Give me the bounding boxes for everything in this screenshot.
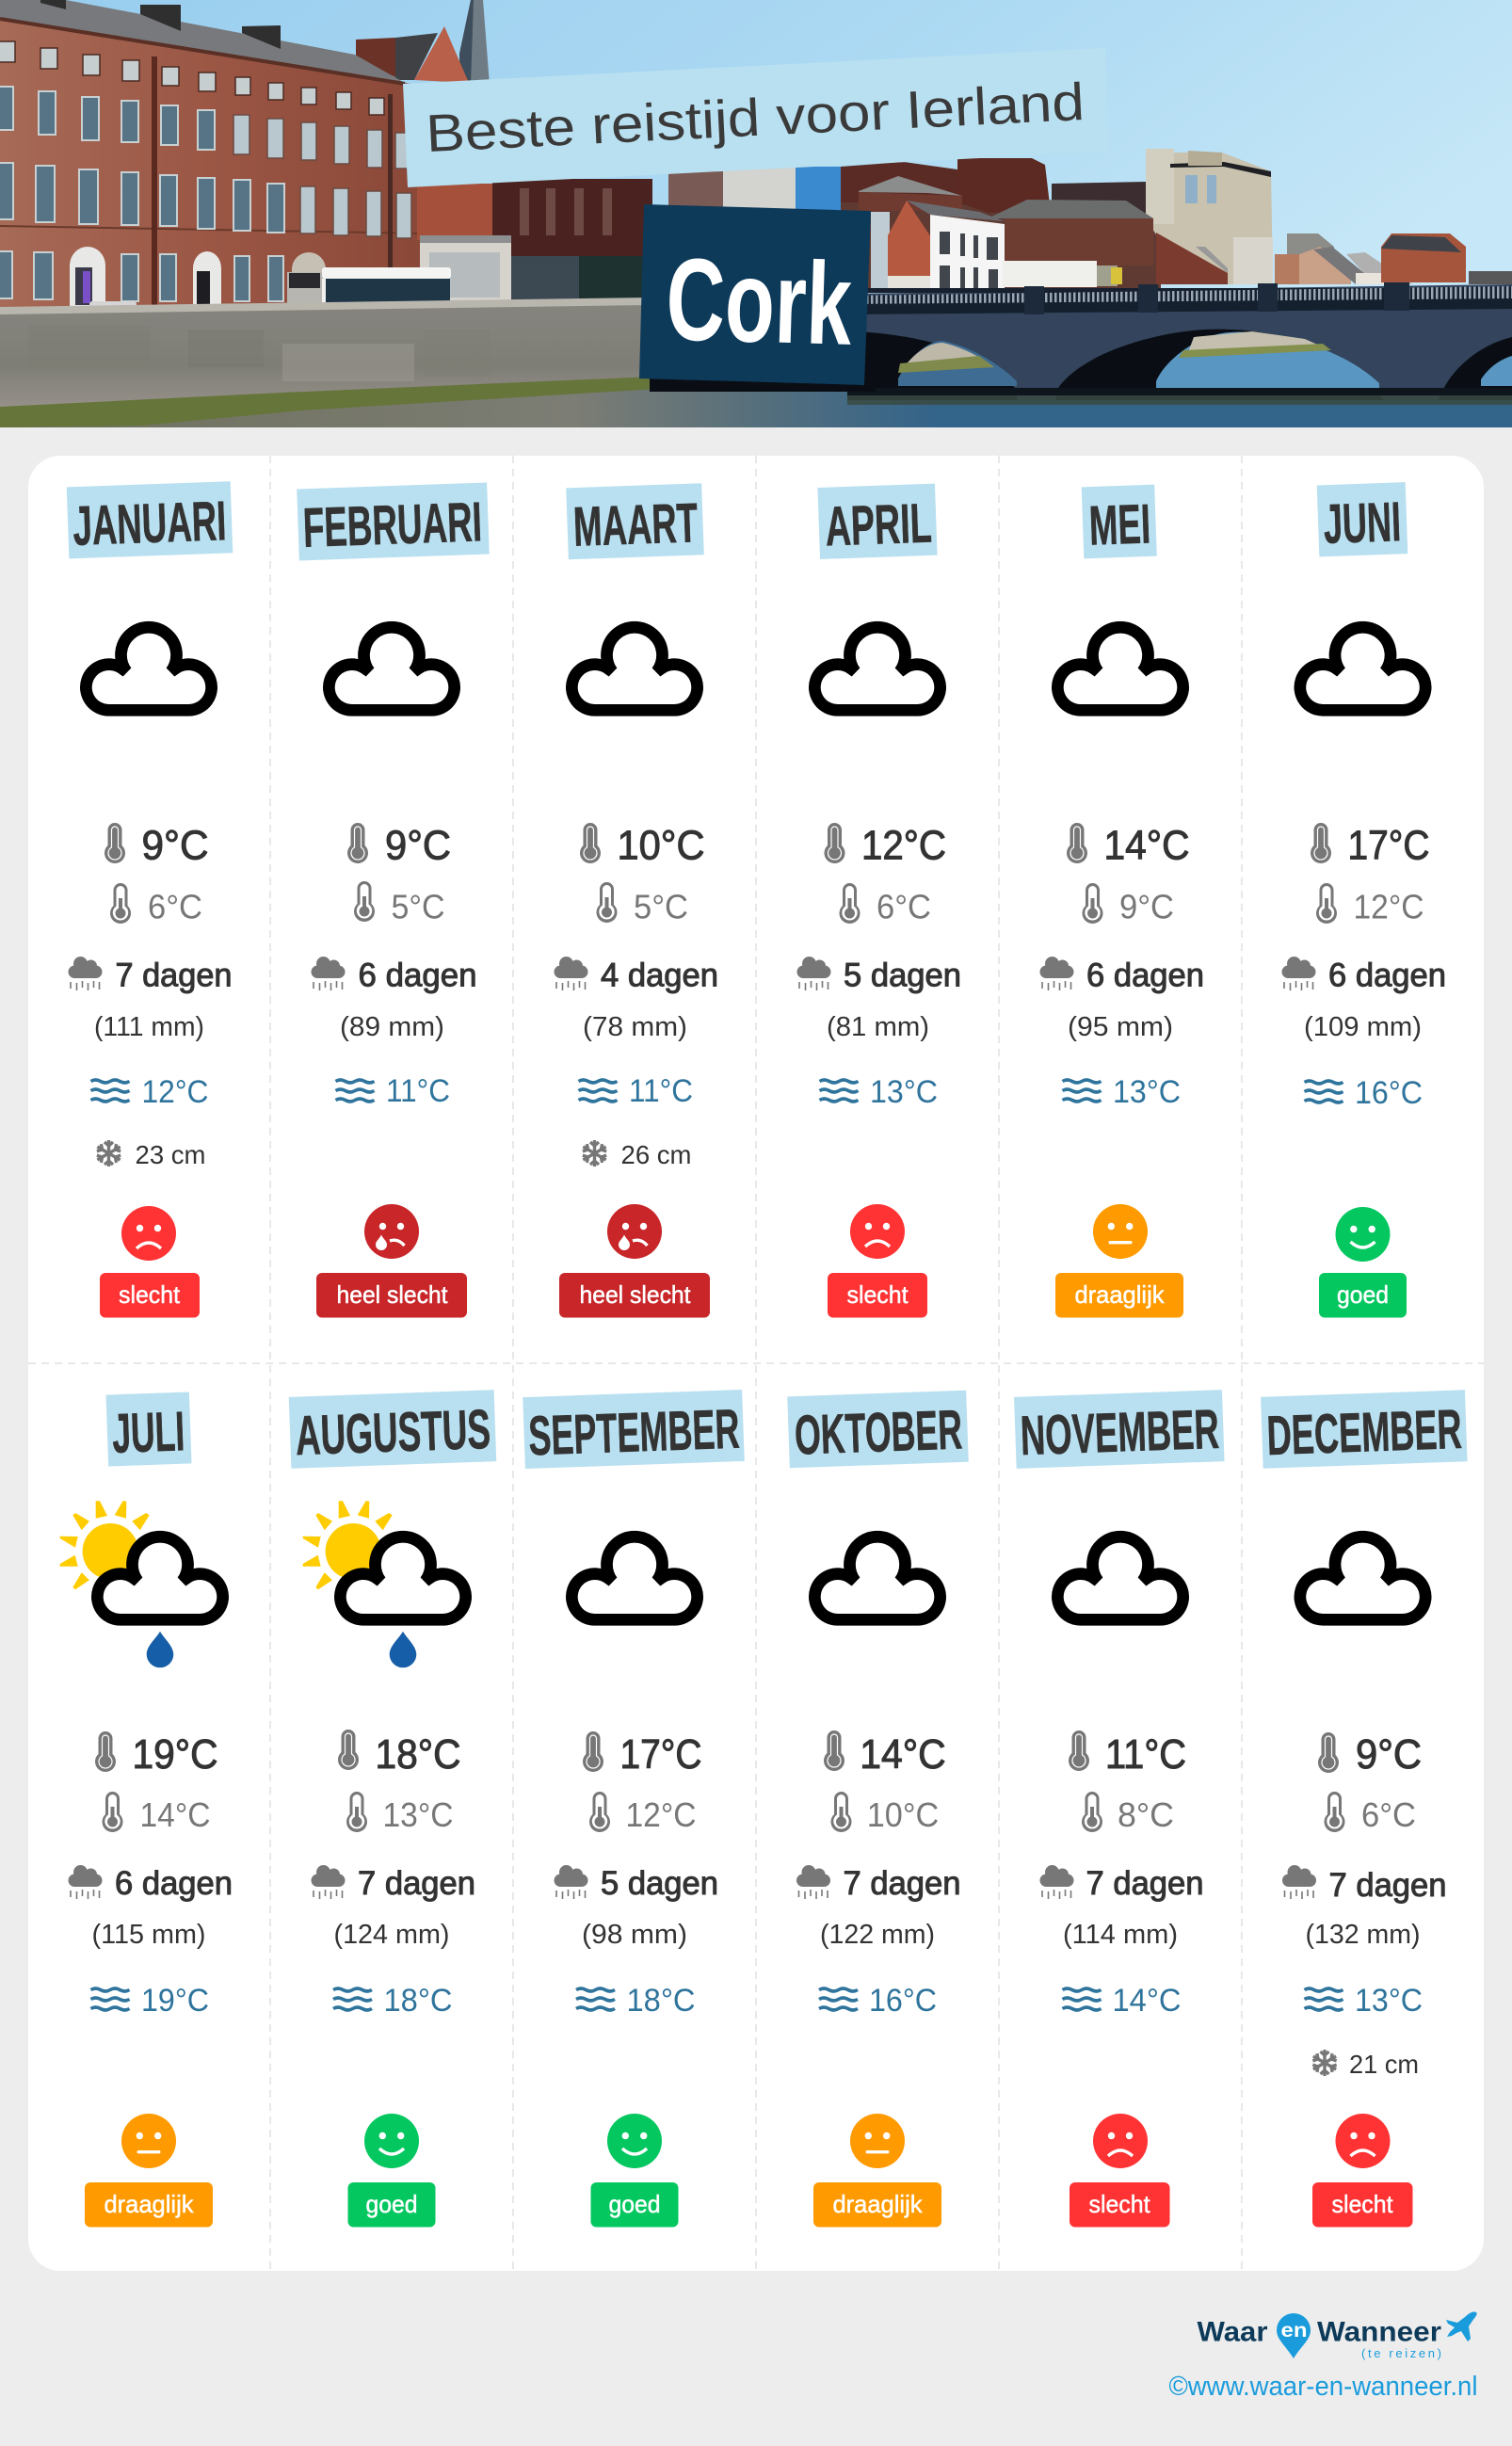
sea temperature: 18°C [384,1983,452,2019]
month heading: oktober [787,1391,969,1468]
min temperature [1316,883,1424,926]
min temperature [597,882,688,926]
month heading: maart [566,483,704,559]
month heading: november [1014,1390,1225,1469]
month heading: april [817,484,938,559]
panel: november [1014,1390,1225,2228]
snow [1311,2050,1419,2079]
icon: plane [1446,2311,1477,2341]
rating label [1070,2182,1169,2228]
panel: januari [67,481,233,1317]
min temperature [589,1792,697,1834]
sea temperature [1062,1983,1181,2019]
rating label [85,2182,213,2228]
max temperature: 19°C [132,1731,218,1778]
sea temperature [819,1074,938,1110]
sea temperature: 13°C [870,1074,938,1110]
icon: cloud [1057,627,1183,710]
max temperature: 17°C [619,1731,702,1778]
icon: cloud [1300,627,1425,710]
month heading: februari: FEBRUARI [302,491,483,559]
rating label: slecht [847,1280,909,1309]
bus [287,267,451,306]
sea temperature [333,1983,452,2019]
rainfall: (98 mm) [582,1920,687,1950]
rating label: goed [608,2190,661,2218]
rain days: 7 dagen [1086,1865,1203,1902]
rainfall: (111 mm) [94,1012,204,1042]
rating label [813,2182,941,2228]
panel: augustus [289,1390,496,2228]
max temperature [825,823,946,868]
max temperature: 9°C [385,823,451,868]
month heading: mei [1082,485,1157,558]
sea temperature [1305,1983,1423,2019]
title banner: Beste reistijd voor Ierland [425,72,1086,163]
max temperature: 12°C [861,823,946,868]
min temperature [840,883,931,926]
month heading: januari [67,481,233,558]
quay wall [0,298,650,318]
min temperature: 12°C [1354,887,1424,926]
panel: juli [60,1392,233,2228]
rainfall: (132 mm) [1305,1920,1420,1950]
max temperature [1069,1730,1186,1778]
sea temperature [90,1074,209,1110]
month heading: augustus: AUGUSTUS [295,1398,491,1467]
max temperature [1318,1731,1422,1778]
max temperature: 10°C [618,823,704,868]
icon: cloud [571,1537,698,1619]
max temperature [583,1731,702,1778]
min temperature [110,883,202,926]
month heading: juli [106,1392,191,1467]
icon: location pin [1277,2313,1311,2358]
rain days: 7 dagen [358,1865,475,1902]
city name plate: Cork [639,204,871,385]
rating label: goed [365,2190,418,2218]
white card with calendar [28,456,1484,2271]
panel: april [796,484,961,1318]
rating smiley [364,1204,419,1259]
max temperature [580,823,704,868]
sea temperature: 13°C [1113,1074,1181,1110]
rainfall: (78 mm) [583,1012,687,1042]
icon: cloud [1300,1537,1425,1619]
month heading: februari [297,482,490,561]
min temperature [830,1792,939,1834]
sea temperature: 18°C [627,1983,695,2019]
sea temperature [90,1983,209,2019]
min temperature: 10°C [867,1795,939,1834]
logo: Waar en Wanneer: Waar [1198,2317,1268,2348]
sea temperature: 13°C [1355,1983,1423,2019]
rainfall: (122 mm) [820,1920,935,1950]
bridge [847,284,1512,400]
rain days: 6 dagen [358,957,476,994]
water [0,381,1512,427]
rating label: slecht [1088,2190,1150,2218]
month heading: oktober: OKTOBER [794,1398,963,1467]
rating smiley [1093,2114,1148,2168]
panel: maart [554,483,718,1318]
sea temperature: 14°C [1113,1983,1181,2019]
logo: Waar en Wanneer [1198,2311,1477,2360]
rating label [1055,1273,1183,1318]
arched doors [70,247,326,307]
rating label: slecht [119,1280,181,1309]
min temperature [1083,883,1174,926]
title banner [403,48,1109,187]
snow [95,1140,205,1169]
rating smiley [121,1206,176,1261]
snow: 21 cm [1349,2050,1419,2079]
rainfall: (124 mm) [333,1920,450,1950]
rating smiley [1335,2114,1390,2168]
rating label: heel slecht [337,1280,448,1309]
min temperature [1082,1792,1174,1834]
icon: sun, cloud and rain drop [60,1501,223,1667]
icon: cloud [86,627,212,710]
min temperature [354,881,444,926]
rating label [591,2182,678,2228]
panel: december [1261,1390,1468,2228]
logo: Waar en Wanneer: en [1280,2320,1307,2341]
rain days: 7 dagen [1329,1867,1446,1904]
rating smiley [1335,1207,1390,1262]
sea temperature: 11°C [629,1073,693,1109]
min temperature: 5°C [392,887,444,926]
rainfall: (115 mm) [92,1920,205,1950]
grass bank [0,377,673,427]
min temperature [346,1792,454,1834]
rating label [559,1273,710,1318]
max temperature: 14°C [860,1731,946,1778]
min temperature: 13°C [382,1795,454,1834]
icon: cloud [814,627,941,710]
rainfall: (89 mm) [340,1012,444,1042]
sea temperature [819,1983,937,2019]
max temperature [105,823,209,868]
rainfall: (81 mm) [827,1012,929,1042]
rain days: 7 dagen [844,1865,960,1902]
header photo: Cork quay and bridge [0,0,1512,427]
rain days: 5 dagen [601,1865,718,1902]
max temperature: 11°C [1105,1731,1186,1778]
rating label [828,1273,927,1318]
min temperature: 6°C [1361,1795,1416,1834]
max temperature [95,1731,218,1778]
max temperature: 18°C [375,1731,461,1778]
min temperature: 14°C [139,1795,211,1834]
max temperature [824,1730,946,1778]
rating label: slecht [1331,2190,1393,2218]
panel: september [523,1390,745,2228]
rainfall: (109 mm) [1304,1012,1422,1042]
month heading: juni [1317,482,1407,556]
logo: Waar en Wanneer: Wanneer [1317,2317,1441,2348]
rainfall: (95 mm) [1068,1012,1173,1042]
rain days: 4 dagen [601,957,718,994]
sea temperature: 19°C [141,1983,209,2019]
rating label: draaglijk [832,2190,923,2218]
month heading: april: APRIL [825,492,933,557]
rating label: draaglijk [104,2190,194,2218]
month heading: november: NOVEMBER [1020,1398,1220,1467]
rainfall: (114 mm) [1063,1920,1178,1950]
rating smiley [1093,1204,1148,1259]
snow: 26 cm [621,1140,691,1169]
rain days: 6 dagen [1086,957,1204,994]
snow: 23 cm [136,1140,205,1169]
max temperature: 17°C [1348,823,1429,868]
sea temperature [576,1983,695,2019]
rating smiley [121,2114,176,2168]
rating label: draaglijk [1075,1280,1165,1309]
min temperature: 12°C [625,1795,697,1834]
min temperature [102,1792,211,1834]
snow [581,1140,691,1169]
month heading: september: SEPTEMBER [527,1398,741,1467]
sea temperature: 12°C [141,1074,209,1110]
panel: juni [1282,482,1446,1318]
rating label [1312,2182,1412,2228]
website url: ©www.waar-en-wanneer.nl [1169,2372,1478,2402]
rating label: heel slecht [580,1280,691,1309]
rain days: 6 dagen [1328,957,1446,994]
panel: oktober [787,1391,969,2228]
rating label: goed [1337,1280,1389,1309]
month heading: mei: MEI [1088,492,1151,557]
month heading: juli: JULI [111,1400,185,1465]
icon: cloud [329,627,455,710]
sea temperature [1062,1074,1181,1110]
min temperature: 5°C [634,887,688,926]
logo: Waar en Wanneer: (te reizen) [1361,2346,1441,2360]
rating label [1319,1273,1407,1318]
rain days: 5 dagen [844,957,961,994]
rating smiley [607,2114,662,2168]
min temperature: 8°C [1118,1795,1174,1834]
rating smiley [850,1204,905,1259]
sea temperature: 11°C [386,1073,450,1109]
cars [89,301,137,309]
max temperature: 14°C [1103,823,1190,868]
rating smiley [607,1204,662,1259]
rating label [316,1273,467,1318]
sea temperature: 16°C [1355,1075,1423,1111]
rain days: 6 dagen [115,1865,233,1902]
min temperature: 6°C [148,887,202,926]
rating label [348,2182,435,2228]
sea temperature [578,1073,693,1109]
max temperature: 9°C [1356,1731,1422,1778]
rating label [100,1273,200,1318]
windows of the brick building [0,41,384,115]
min temperature: 9°C [1119,887,1174,926]
icon: cloud [814,1537,941,1619]
buildings right of title [841,162,957,209]
min temperature [1324,1792,1416,1834]
min temperature: 6°C [877,887,931,926]
sea temperature: 16°C [869,1983,937,2019]
panel: mei [1039,485,1204,1318]
sea temperature [1305,1075,1423,1111]
city name plate: Cork: Cork [665,234,854,370]
rain days [1282,1865,1446,1904]
bridge arches [847,331,1017,400]
month heading: juni: JUNI [1323,491,1402,555]
panel: februari [297,482,490,1318]
rating smiley [364,2114,419,2168]
month heading: januari: JANUARI [72,490,227,557]
icon: cloud [1057,1537,1183,1619]
max temperature [338,1730,461,1778]
month heading: maart: MAART [572,491,699,558]
max temperature [1067,823,1190,868]
icon: cloud [571,627,698,710]
max temperature [1311,823,1429,868]
sea temperature [335,1073,450,1109]
max temperature: 9°C [141,823,209,868]
icon: sun, cloud and rain drop [303,1501,466,1667]
month heading: augustus [289,1390,496,1469]
max temperature [347,823,451,868]
rating smiley [850,2114,905,2168]
rain days: 7 dagen [115,957,232,994]
rain days [68,957,232,994]
month heading: september [523,1390,745,1469]
